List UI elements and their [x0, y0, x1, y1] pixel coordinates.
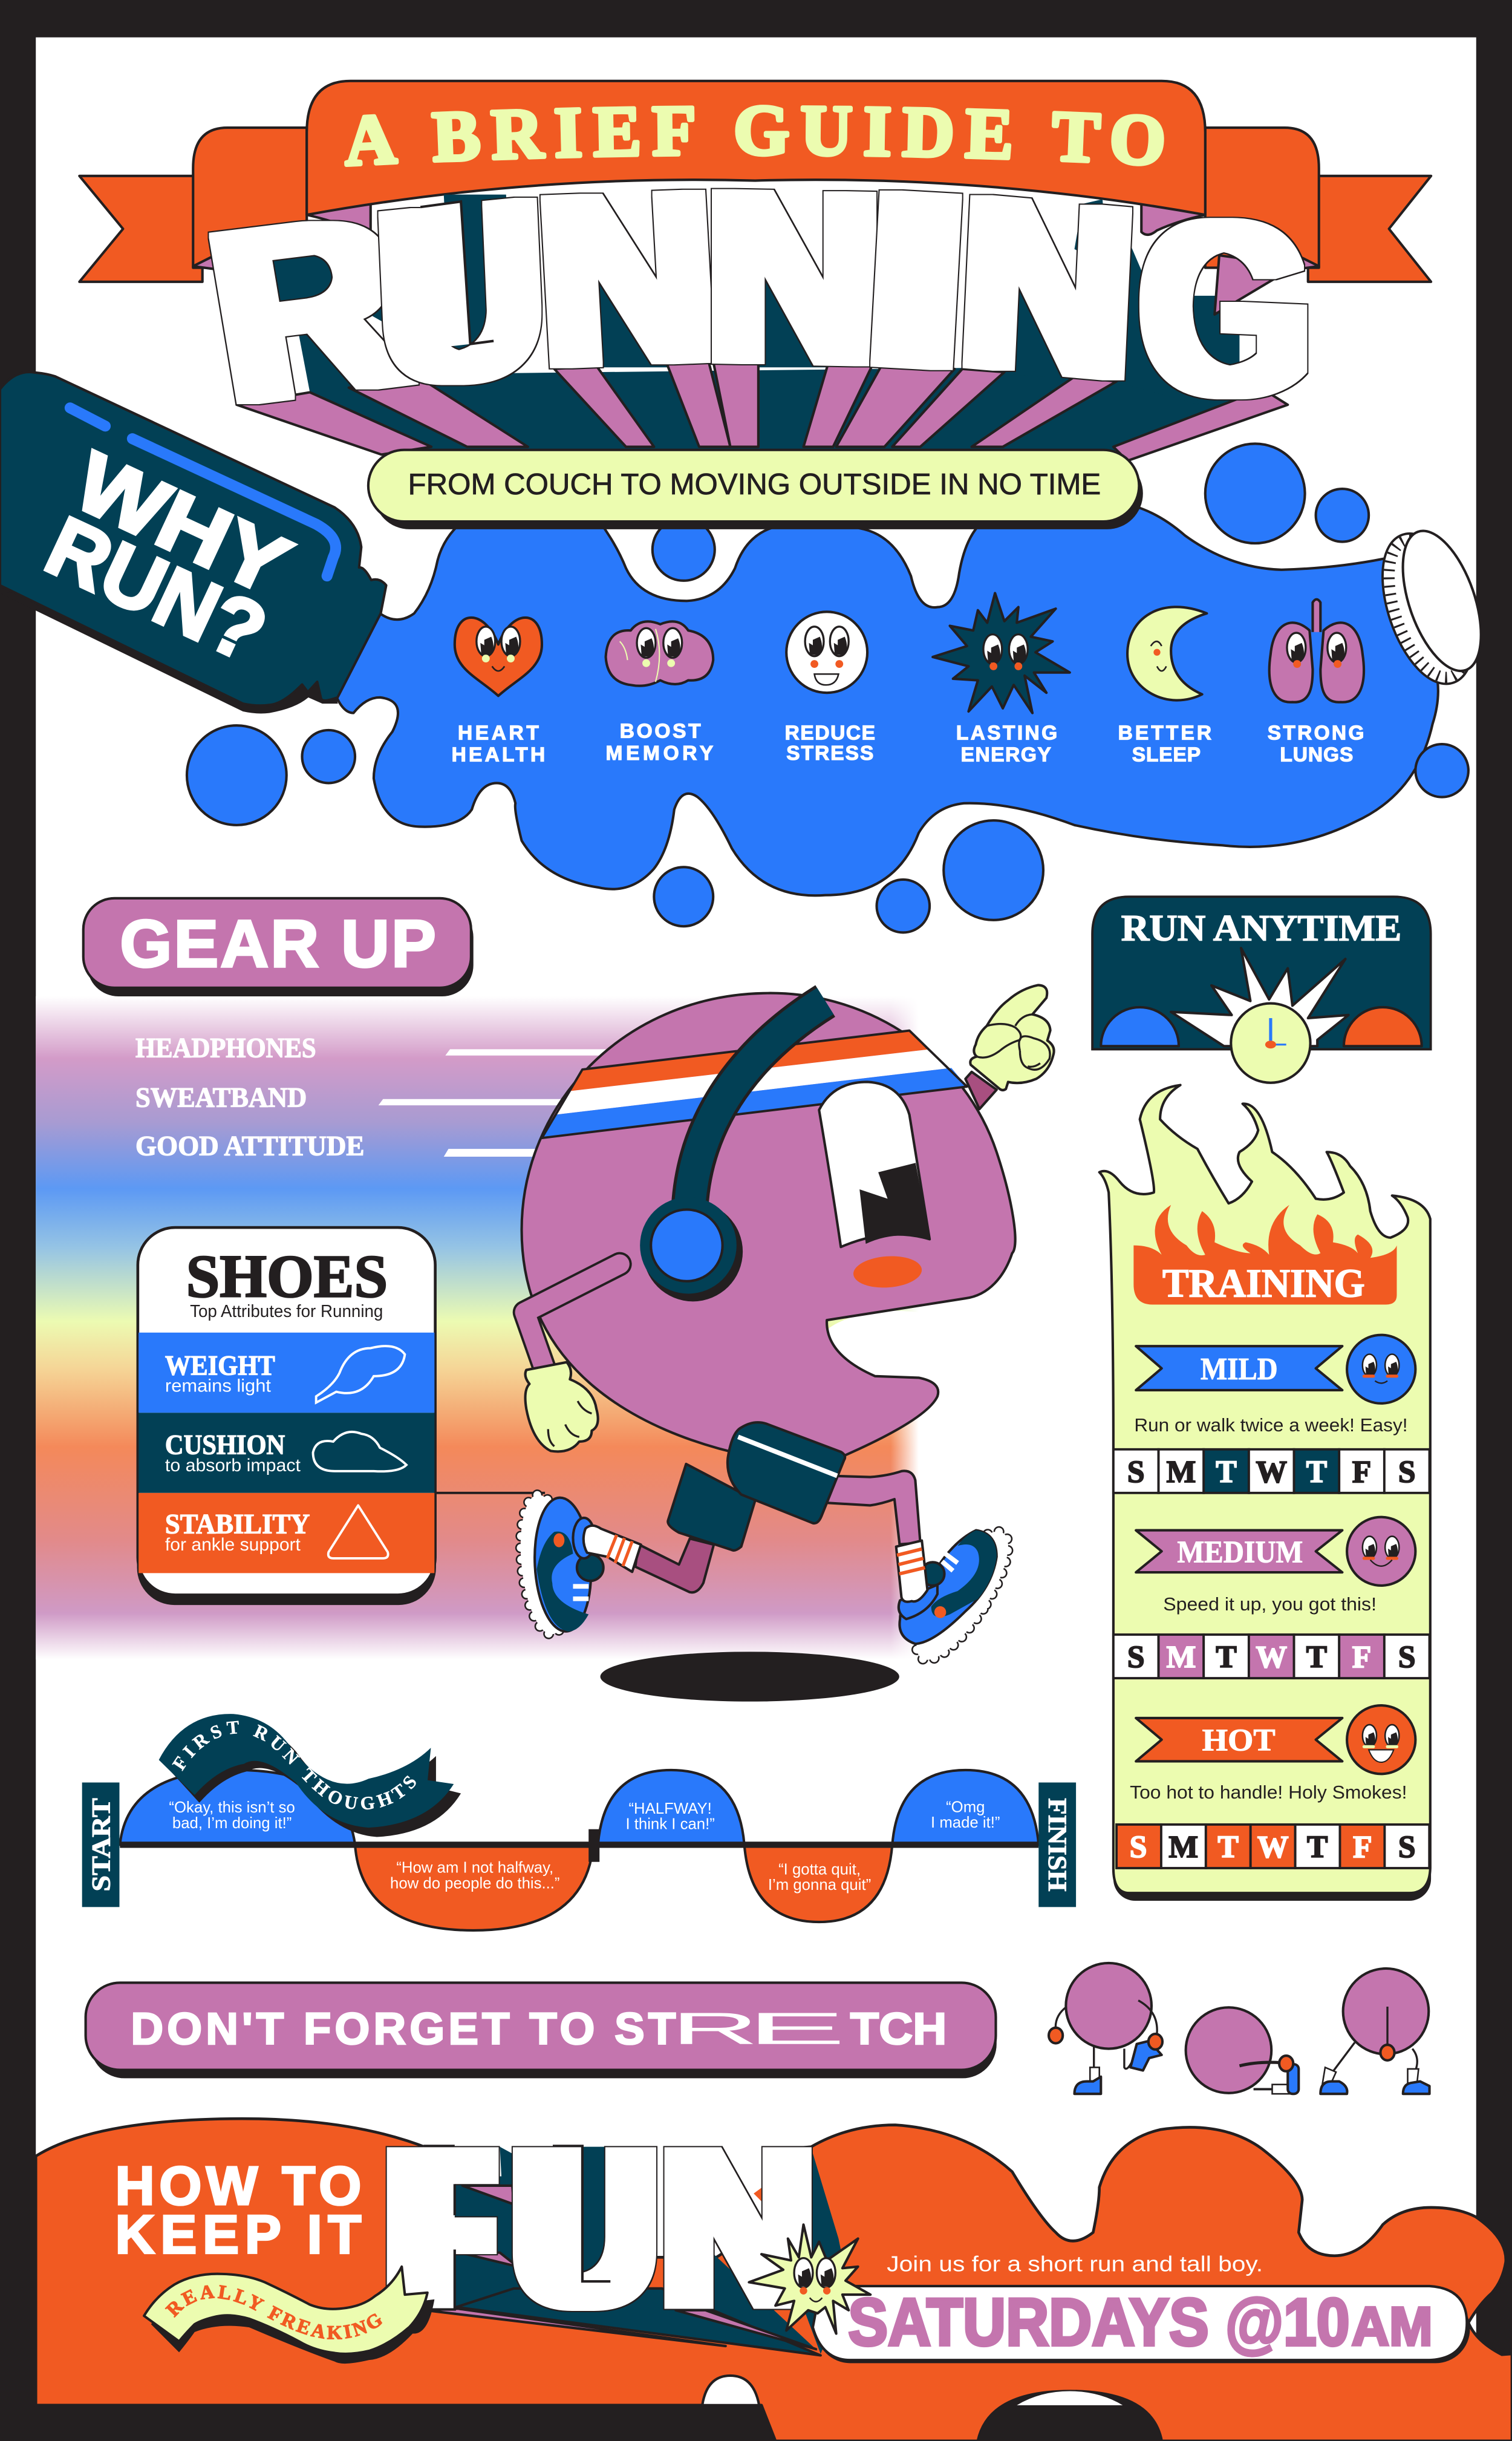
hot schedule — [1116, 1825, 1429, 1868]
benefit: strong lungs: STRONG — [1268, 722, 1364, 744]
quote 5: I made it!” — [931, 1814, 1000, 1831]
stability row: for ankle support — [165, 1535, 301, 1555]
medium schedule: T — [1306, 1640, 1327, 1675]
dark arch — [978, 2391, 1162, 2441]
benefit: strong lungs: LUNGS — [1280, 743, 1353, 766]
quote 5 — [931, 1799, 1000, 1831]
headphones — [640, 1001, 826, 1301]
benefit: reduce stress — [785, 612, 875, 765]
run anytime text: RUN ANYTIME — [1121, 907, 1401, 949]
hot section: Too hot to handle! Holy Smokes! — [1130, 1782, 1407, 1803]
benefit: reduce stress: STRESS — [786, 742, 873, 765]
benefit: lasting energy: LASTING — [956, 722, 1057, 744]
benefit: boost memory — [606, 621, 713, 765]
fold underside right — [1141, 203, 1205, 235]
star mascot — [749, 2224, 870, 2333]
quote 3: “HALFWAY! — [628, 1800, 712, 1817]
quote 1: “Okay, this isn’t so — [169, 1799, 295, 1816]
event pill — [813, 2286, 1470, 2363]
left glove — [526, 1362, 598, 1451]
finish post: FINISH — [1043, 1798, 1072, 1892]
eye — [819, 1082, 930, 1247]
saturdays text: AM — [1352, 2296, 1433, 2358]
stretch text: TCH — [850, 2003, 947, 2054]
gear list — [135, 1033, 623, 1162]
title banner — [78, 80, 1432, 283]
blue splash — [187, 443, 1468, 932]
start post — [82, 1782, 119, 1907]
benefit: reduce stress: REDUCE — [785, 722, 875, 744]
hot schedule: T — [1217, 1830, 1239, 1864]
ribbon text: FIRST RUN THOUGHTS — [172, 1720, 416, 1810]
finish post — [1038, 1782, 1076, 1907]
rainbow speed band — [36, 996, 970, 1659]
benefit: heart health: HEART — [458, 722, 539, 744]
bottle shadow — [0, 592, 338, 713]
hot schedule: M — [1168, 1830, 1198, 1864]
medium schedule: T — [1216, 1640, 1237, 1675]
mild schedule: T — [1216, 1455, 1237, 1489]
hump 3 — [598, 1770, 745, 1845]
quote 5: “Omg — [946, 1799, 985, 1815]
bubble — [302, 730, 355, 783]
sweatband — [542, 1031, 967, 1138]
medium schedule: S — [1127, 1640, 1145, 1675]
bottle body — [0, 372, 386, 705]
mild schedule: F — [1352, 1455, 1371, 1489]
bottom orange section — [36, 2107, 1512, 2441]
starburst — [1171, 948, 1349, 1046]
benefit: better sleep: BETTER — [1118, 722, 1211, 744]
stretch banner — [86, 1982, 997, 2078]
title: RUNNING: N — [955, 143, 1140, 431]
title: RUNNING: N — [532, 139, 723, 419]
hot schedule: F — [1353, 1830, 1372, 1864]
pointing hand — [970, 985, 1054, 1090]
stretch text — [131, 2003, 947, 2054]
cushion row: CUSHION — [165, 1430, 285, 1460]
how to keep it: KEEP IT — [116, 2204, 361, 2265]
really freaking ribbon — [144, 2267, 434, 2364]
stability row: STABILITY — [165, 1509, 310, 1540]
benefit: lasting energy — [933, 593, 1070, 766]
front shoe — [899, 1520, 1024, 1672]
bubble — [187, 725, 287, 825]
gear list: HEADPHONES — [135, 1033, 316, 1064]
hot schedule: S — [1130, 1830, 1147, 1864]
body — [522, 993, 1015, 1457]
mild schedule: S — [1398, 1455, 1416, 1489]
cushion row: to absorb impact — [165, 1456, 301, 1475]
quote 1 — [169, 1799, 295, 1832]
quote 4: I’m gonna quit” — [768, 1877, 871, 1894]
orange flame title — [1133, 1205, 1396, 1304]
hump 1 — [120, 1770, 355, 1845]
quote 1: bad, I’m doing it!” — [172, 1815, 292, 1832]
hot schedule: W — [1257, 1830, 1289, 1864]
shoes title: SHOES — [186, 1243, 388, 1310]
title: RUNNING: G — [1141, 166, 1310, 451]
FUN big letters: U — [512, 2107, 657, 2348]
cushion row — [138, 1413, 434, 1493]
title: RUNNING: N — [706, 138, 882, 417]
medium schedule: S — [1398, 1640, 1416, 1675]
mild section — [1134, 1335, 1415, 1436]
benefit: boost memory: MEMORY — [606, 742, 713, 765]
shoes card: Top Attributes for Running — [190, 1301, 383, 1321]
back shorts — [668, 1464, 755, 1551]
medium schedule: W — [1256, 1640, 1287, 1675]
ground shadow — [601, 1652, 899, 1702]
subtitle pill — [368, 450, 1143, 529]
banner front — [307, 81, 1205, 215]
shoes card — [137, 1227, 436, 1605]
weight row: remains light — [165, 1376, 271, 1396]
RUN text: RUN? — [33, 499, 280, 681]
banner back fold right — [1205, 128, 1319, 268]
quote 2: how do people do this...” — [390, 1875, 560, 1892]
quote 4: “I gotta quit, — [778, 1861, 861, 1878]
gear up heading: GEAR UP — [120, 907, 436, 981]
pointing arm — [965, 1072, 997, 1109]
WHY text: WHY — [61, 434, 304, 614]
how to keep it: HOW TO — [116, 2155, 361, 2217]
stretch text: E — [746, 2003, 846, 2054]
title: RUNNING — [194, 138, 1310, 456]
FUN big letters — [386, 2107, 815, 2349]
benefit: heart health: HEALTH — [452, 743, 545, 766]
benefit: boost memory: BOOST — [620, 721, 701, 743]
rear sock — [584, 1526, 641, 1572]
blue half sun — [1101, 1007, 1179, 1046]
mild schedule — [1113, 1449, 1430, 1493]
hot section — [1130, 1705, 1415, 1803]
banner tail left — [79, 176, 203, 282]
FUN big letters: N — [661, 2107, 815, 2349]
first run thoughts timeline — [82, 1714, 1077, 1932]
ribbon text: REALLY FREAKING — [165, 2284, 382, 2339]
bubble — [877, 880, 930, 932]
white arch cap — [1017, 2391, 1123, 2405]
bubble — [1316, 489, 1369, 542]
rear leg — [635, 1538, 714, 1592]
weight row: WEIGHT — [165, 1350, 275, 1381]
letter extrusion — [236, 195, 1295, 461]
hump 4 — [745, 1845, 892, 1922]
bottle cap — [1374, 521, 1497, 687]
hot section: HOT — [1202, 1724, 1276, 1758]
splash shape — [335, 506, 1438, 895]
title: RUNNING: R — [194, 162, 422, 456]
medium schedule: M — [1167, 1640, 1196, 1675]
benefit: better sleep — [1118, 607, 1211, 766]
benefit: heart health — [452, 618, 545, 766]
mild section: Run or walk twice a week! Easy! — [1134, 1414, 1407, 1436]
runner character — [515, 985, 1054, 1672]
gear list: GOOD ATTITUDE — [135, 1131, 364, 1162]
run anytime panel — [1092, 897, 1431, 1083]
hump 5 — [892, 1770, 1038, 1845]
training heading: TRAINING — [1162, 1261, 1365, 1306]
timeline axis — [120, 1841, 1038, 1848]
saturdays text: SATURDAYS @10 — [848, 2286, 1349, 2360]
medium schedule: F — [1352, 1640, 1371, 1675]
banner headline: A BRIEF GUIDE TO — [344, 105, 1164, 167]
fun extrusion — [425, 2147, 849, 2355]
gear list: SWEATBAND — [135, 1083, 307, 1114]
quote 3: I think I can!” — [625, 1816, 715, 1833]
quote 4 — [768, 1861, 871, 1894]
banner tail right — [1308, 176, 1431, 282]
small bubble behind pill — [653, 518, 715, 581]
mild section: MILD — [1201, 1352, 1278, 1387]
connector line — [436, 1492, 545, 1494]
fold tip left — [193, 255, 217, 269]
title: RUNNING: U — [373, 145, 550, 442]
title: RUNNING: I — [850, 138, 982, 422]
panel flame body — [1100, 1085, 1430, 1893]
quote 3 — [625, 1800, 715, 1833]
bubble — [654, 867, 713, 926]
stretching figures — [1049, 1963, 1430, 2094]
medium section: MEDIUM — [1177, 1535, 1303, 1569]
training panel — [1100, 1085, 1431, 1901]
bottle highlight — [70, 408, 336, 576]
front leg — [818, 1471, 921, 1544]
hump 2 — [355, 1845, 593, 1930]
start post: START — [87, 1798, 116, 1892]
weight row — [138, 1333, 434, 1413]
panel shadow — [1113, 1822, 1431, 1901]
front sock — [896, 1541, 927, 1602]
mild schedule: W — [1256, 1455, 1287, 1489]
wavy ribbon — [158, 1714, 461, 1837]
medium schedule — [1113, 1635, 1430, 1678]
subtitle text: FROM COUCH TO MOVING OUTSIDE IN NO TIME — [408, 468, 1101, 501]
bubble — [1205, 443, 1305, 543]
stretch text: R — [671, 2004, 759, 2054]
fold underside left — [307, 203, 371, 235]
invitation text: Join us for a short run and tall boy. — [887, 2252, 1263, 2276]
figure 2 — [1186, 2007, 1299, 2094]
gear up heading — [83, 898, 474, 996]
orange splash — [36, 2119, 1512, 2441]
quote 2 — [390, 1860, 560, 1892]
benefit: lasting energy: ENERGY — [961, 743, 1051, 766]
hot schedule: T — [1307, 1830, 1328, 1864]
benefit: better sleep: SLEEP — [1132, 743, 1201, 766]
mouth white — [815, 1311, 976, 1392]
front shorts — [728, 1422, 845, 1523]
orange half sun — [1344, 1007, 1422, 1046]
figure 1 — [1049, 1963, 1162, 2094]
mild schedule: M — [1167, 1455, 1196, 1489]
how to keep it — [116, 2155, 361, 2265]
bubble — [943, 820, 1043, 920]
bottle: why run — [0, 372, 386, 713]
left arm — [525, 1264, 620, 1370]
medium section: Speed it up, you got this! — [1163, 1593, 1377, 1615]
rear shoe — [515, 1492, 604, 1636]
blush — [852, 1254, 923, 1290]
mild schedule: T — [1306, 1455, 1327, 1489]
stability row — [138, 1493, 434, 1573]
medium section — [1136, 1517, 1415, 1615]
bubble — [1415, 744, 1468, 797]
stretch text: DON'T FORGET TO ST — [131, 2003, 676, 2054]
small white notch — [702, 2376, 759, 2405]
figure 3 — [1320, 1969, 1430, 2094]
mild schedule: S — [1127, 1455, 1145, 1489]
halfway marker — [588, 1829, 599, 1862]
benefit: strong lungs — [1268, 600, 1364, 766]
fold tip right — [1295, 255, 1319, 269]
clock — [1231, 1004, 1311, 1083]
banner back fold left — [193, 128, 307, 268]
quote 2: “How am I not halfway, — [396, 1860, 553, 1877]
hot schedule: S — [1398, 1830, 1416, 1864]
FUN big letters: F — [386, 2107, 494, 2349]
